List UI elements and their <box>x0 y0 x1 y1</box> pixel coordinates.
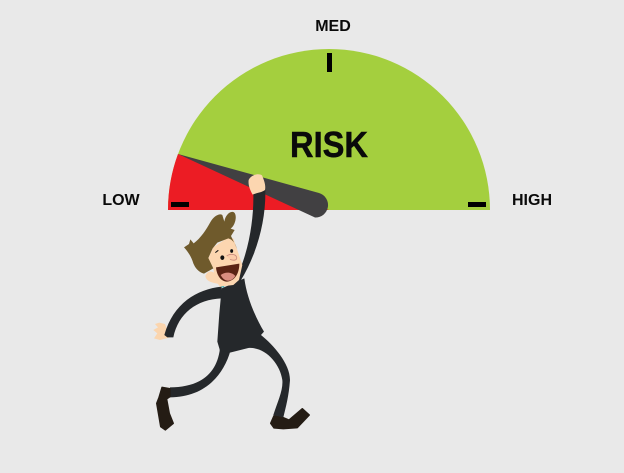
raised arm <box>233 190 265 283</box>
raised hand gripping needle <box>249 174 265 195</box>
gauge: semicircular dial <box>168 49 490 210</box>
tick: medium <box>327 53 332 72</box>
front leg and shoes <box>157 348 309 430</box>
tick: high <box>468 202 486 207</box>
hair <box>184 212 237 274</box>
head <box>184 212 242 287</box>
eyebrow <box>215 250 218 253</box>
eye: right <box>230 249 233 253</box>
torso and rear leg <box>217 278 290 417</box>
label: HIGH: HIGH <box>512 192 552 209</box>
label: MED: MED <box>315 18 351 35</box>
gauge green zone <box>168 49 490 210</box>
eye: left <box>220 255 224 260</box>
title: RISK: RISK <box>290 124 368 165</box>
face <box>208 238 242 287</box>
label: LOW: LOW <box>102 192 141 209</box>
tongue <box>221 273 235 281</box>
open mouth <box>216 264 239 282</box>
gauge needle <box>178 154 328 218</box>
tick: low <box>171 202 189 207</box>
gauge red zone <box>168 154 329 210</box>
neck tie <box>221 284 225 287</box>
businessman character <box>153 174 309 430</box>
nose <box>227 254 237 260</box>
back arm and hand <box>153 287 222 340</box>
ear <box>205 271 221 284</box>
